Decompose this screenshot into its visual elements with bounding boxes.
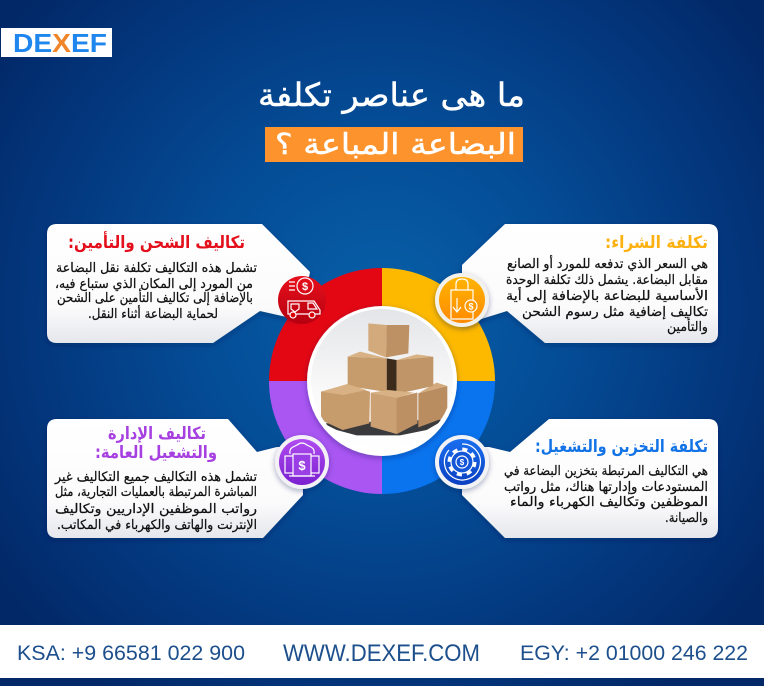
panel: shipping and insurance <box>47 224 310 343</box>
phone: EGY: EGY: +2 01000 246 222 <box>520 642 748 665</box>
icon: shopping bag with dollar <box>435 273 489 327</box>
body: purchase cost <box>506 255 708 335</box>
icon: delivery van with dollar <box>278 276 326 324</box>
body: shipping and insurance: من المورد إلى المكان الذي ستباع فيه، <box>55 277 253 292</box>
icon: shopping bag with dollar: $ <box>468 302 474 312</box>
center photo: stacked cardboard boxes <box>307 306 457 456</box>
body: purchase cost: تكاليف إضافية مثل رسوم الشحن <box>522 305 708 320</box>
icon: gear with dollar <box>435 435 489 489</box>
body: shipping and insurance: لحماية البضاعة أثناء النقل. <box>88 305 218 322</box>
icon: gear with dollar: $ <box>460 458 465 467</box>
heading: storage and operation: تكلفة التخزين والتشغيل: <box>535 437 708 457</box>
body: storage and operation: الموظفين وتكاليف الكهرباء والماء <box>510 495 708 510</box>
heading: admin and general operation <box>95 424 217 463</box>
panel: storage and operation <box>462 419 718 538</box>
website: WWW.DEXEF.COM <box>283 640 480 667</box>
body: storage and operation: والصيانة. <box>665 511 708 526</box>
body: storage and operation: هي التكاليف المرتبطة بتخزين البضاعة في <box>504 464 708 479</box>
heading: admin and general operation: والتشغيل العامة: <box>95 443 217 463</box>
footer contact bar <box>0 625 764 678</box>
ring chart <box>269 268 495 494</box>
phone: KSA: KSA: +9 66581 022 900 <box>17 642 245 665</box>
body: admin and general operation: رواتب الموظفين الإداريين وتكاليف <box>55 502 257 517</box>
body: shipping and insurance <box>55 261 257 322</box>
body: storage and operation <box>504 464 708 526</box>
subtitle banner: البضاعة المباعة ؟ <box>275 127 516 161</box>
body: admin and general operation: الإنترنت والهاتف والكهرباء في المكاتب. <box>57 518 257 533</box>
icon: banknotes with gear <box>275 435 329 489</box>
body: admin and general operation <box>54 470 257 533</box>
body: admin and general operation: تشمل هذه التكاليف جميع التكاليف غير <box>54 470 257 485</box>
title: ما هى عناصر تكلفة <box>258 76 525 114</box>
heading: purchase cost: تكلفة الشراء: <box>605 233 708 253</box>
body: purchase cost: والتأمين <box>667 317 708 335</box>
body: admin and general operation: المباشرة المرتبطة بالعمليات التجارية، مثل <box>55 485 257 500</box>
heading: admin and general operation: تكاليف الإدارة <box>108 424 206 444</box>
body: shipping and insurance: بالإضافة إلى تكاليف التأمين على الشحن <box>57 288 253 306</box>
icon: delivery van with dollar: $ <box>302 281 308 293</box>
panel: admin and general operation <box>47 419 303 538</box>
body: shipping and insurance: تشمل هذه التكاليف تكلفة نقل البضاعة <box>56 261 257 276</box>
body: purchase cost: الأساسية للبضاعة بالإضافة إلى أية <box>506 287 708 304</box>
body: purchase cost: هي السعر الذي تدفعه للمورد أو الصانع <box>507 255 708 272</box>
body: purchase cost: مقابل البضاعة. يشمل ذلك تكلفة الوحدة <box>506 273 708 288</box>
icon: banknotes with gear: $ <box>298 458 306 473</box>
panel: purchase cost <box>462 224 718 343</box>
logo: DEXEF <box>13 28 107 58</box>
body: storage and operation: المستودعات وإدارتها هناك، مثل رواتب <box>504 480 708 495</box>
heading: shipping and insurance: تكاليف الشحن والتأمين: <box>68 231 245 253</box>
